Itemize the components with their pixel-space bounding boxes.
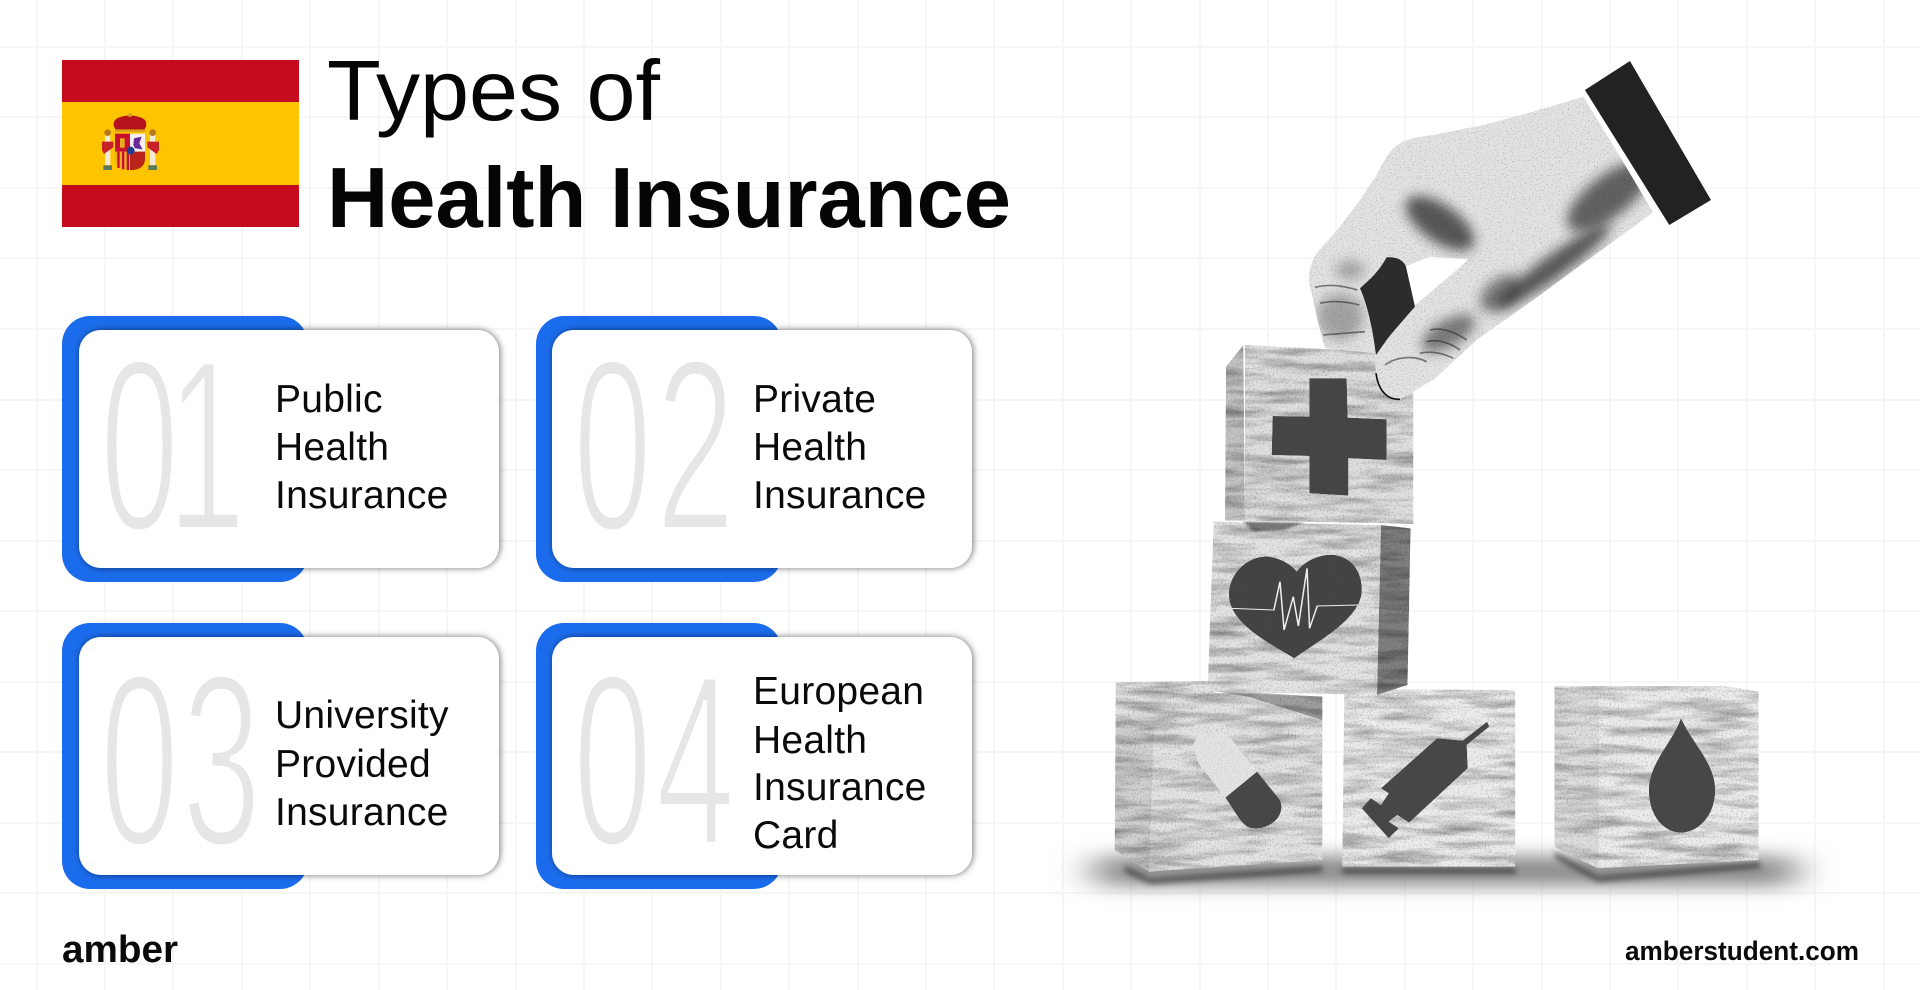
number 01: 1 — [167, 310, 246, 583]
icon: capsule — [1193, 733, 1281, 828]
illustration: ground shadow under blocks — [1095, 852, 1795, 886]
number 04 — [573, 625, 735, 898]
number 01: 0 — [100, 310, 179, 583]
illustration: wooden block with syringe — [1342, 689, 1515, 867]
illustration: wooden block with blood drop — [1554, 686, 1759, 868]
illustration: wooden block with cross — [1225, 345, 1413, 524]
illustration: wooden block with heart — [1208, 522, 1411, 695]
label: Private Health Insurance — [753, 378, 927, 517]
label: Public Health Insurance — [275, 378, 449, 517]
icon: Spanish flag — [62, 60, 299, 227]
label: European Health Insurance Card: Insurance — [753, 766, 927, 809]
number 04: 0 — [573, 625, 652, 898]
number 03: 3 — [182, 625, 261, 898]
label: European Health Insurance Card: Health — [753, 719, 867, 762]
label: Private Health Insurance: Insurance — [753, 474, 927, 517]
logo: amber: amber — [62, 929, 178, 971]
number 04: 4 — [656, 625, 735, 898]
illustration: wooden block with pill — [1115, 681, 1322, 872]
label: European Health Insurance Card: Card — [753, 814, 839, 857]
panel: card 03 University Provided Insurance — [62, 623, 499, 898]
icon: blood drop — [1649, 718, 1715, 833]
title — [327, 44, 1011, 246]
number 02: 0 — [573, 310, 652, 583]
number 03: 0 — [100, 625, 179, 898]
label: University Provided Insurance: Insurance — [275, 791, 449, 834]
icon: syringe — [1362, 722, 1489, 838]
title: Health Insurance — [327, 151, 1011, 246]
website: amberstudent.com: amberstudent.com — [1625, 936, 1859, 966]
label: European Health Insurance Card — [753, 670, 927, 857]
icon: coat of arms — [102, 113, 159, 170]
icon: heart with pulse line — [1229, 555, 1362, 658]
icon: medical cross — [1272, 378, 1387, 496]
number 01 — [100, 310, 246, 583]
label: University Provided Insurance: Provided — [275, 743, 431, 786]
illustration: hand holding the block — [1300, 61, 1711, 407]
panel: card 01 Public Health Insurance — [62, 310, 499, 583]
label: University Provided Insurance — [275, 694, 449, 834]
number 02 — [573, 310, 735, 583]
label: Public Health Insurance: Insurance — [275, 474, 449, 517]
number 02: 2 — [656, 310, 735, 583]
label: Public Health Insurance: Public — [275, 378, 383, 421]
panel: card 02 Private Health Insurance — [536, 310, 972, 583]
dark finger behind the thumb — [1360, 257, 1415, 355]
label: Private Health Insurance: Health — [753, 426, 867, 469]
label: European Health Insurance Card: European — [753, 670, 924, 713]
white shirt strip — [1583, 90, 1656, 213]
label: Private Health Insurance: Private — [753, 378, 876, 421]
number 03 — [100, 625, 261, 898]
jacket cuff — [1585, 61, 1711, 225]
label: University Provided Insurance: University — [275, 694, 449, 737]
panel: card 04 European Health Insurance Card — [536, 623, 972, 898]
title: Types of — [327, 44, 660, 139]
label: Public Health Insurance: Health — [275, 426, 389, 469]
